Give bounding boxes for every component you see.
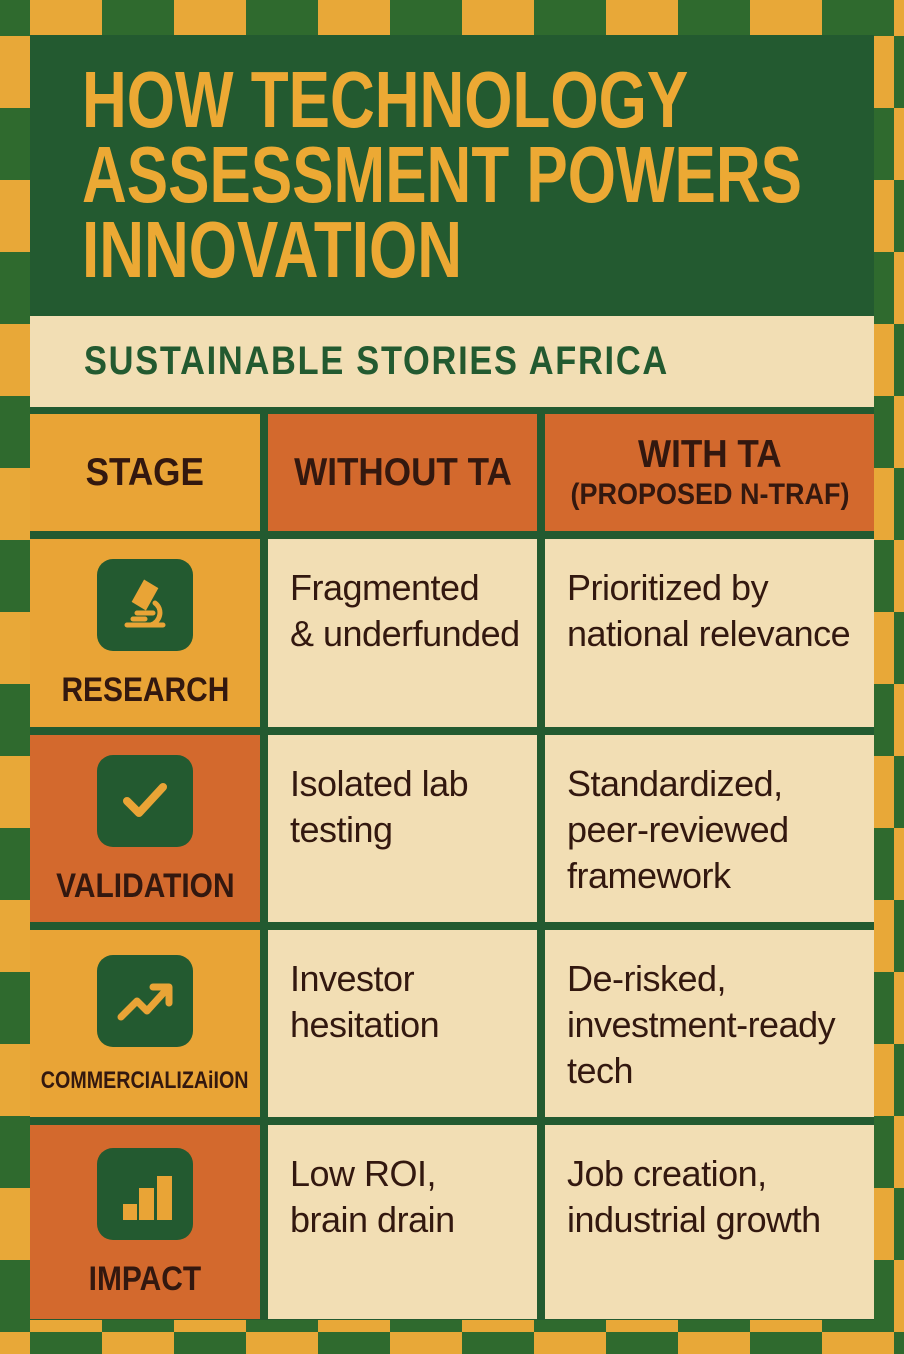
commercialization with TA: De-risked, — [567, 958, 726, 999]
impact with TA: industrial growth — [567, 1199, 821, 1240]
commercialization with TA — [545, 930, 874, 1117]
title: INNOVATION — [82, 205, 462, 294]
header: without TA — [268, 414, 537, 531]
impact without TA: Low ROI, — [290, 1153, 436, 1194]
header: with TA: WITH TA — [638, 433, 781, 476]
row: commercialization stage — [30, 930, 260, 1117]
validation with TA: framework — [567, 855, 731, 896]
header: without TA: WITHOUT TA — [294, 451, 511, 494]
research with TA: national relevance — [567, 613, 850, 654]
title: ASSESSMENT POWERS — [82, 130, 802, 219]
row: validation stage — [30, 735, 260, 922]
row: impact stage: IMPACT — [89, 1260, 201, 1298]
title: HOW TECHNOLOGY — [82, 55, 688, 144]
research with TA: Prioritized by — [567, 567, 768, 608]
row: validation stage: VALIDATION — [56, 866, 234, 904]
commercialization without TA: hesitation — [290, 1004, 439, 1045]
validation with TA: Standardized, — [567, 763, 783, 804]
header: stage: STAGE — [86, 451, 204, 494]
title — [82, 55, 802, 294]
commercialization without TA: Investor — [290, 958, 414, 999]
subtitle band — [30, 316, 874, 407]
header: stage — [30, 414, 260, 531]
commercialization with TA: investment-ready — [567, 1004, 835, 1045]
research without TA — [268, 539, 537, 727]
icon: bar chart — [97, 1148, 193, 1240]
research without TA: Fragmented — [290, 567, 479, 608]
icon: checkmark — [97, 754, 193, 846]
row: research stage — [30, 539, 260, 727]
research without TA: & underfunded — [290, 613, 520, 654]
validation with TA: peer-reviewed — [567, 809, 789, 850]
impact with TA: Job creation, — [567, 1153, 767, 1194]
row: commercialization stage: COMMERCIALIZAiION — [41, 1066, 249, 1094]
commercialization without TA — [268, 930, 537, 1117]
row: research stage: RESEARCH — [61, 671, 229, 709]
impact without TA: brain drain — [290, 1199, 455, 1240]
header: with TA: (PROPOSED N-TRAF) — [570, 478, 849, 511]
icon: trend arrow — [97, 954, 193, 1046]
impact without TA — [268, 1125, 537, 1319]
validation without TA: Isolated lab — [290, 763, 468, 804]
validation without TA — [268, 735, 537, 922]
impact with TA — [545, 1125, 874, 1319]
icon: microscope — [97, 559, 193, 651]
row: impact stage — [30, 1125, 260, 1319]
subtitle band: SUSTAINABLE STORIES AFRICA — [84, 339, 669, 383]
commercialization with TA: tech — [567, 1050, 633, 1091]
validation without TA: testing — [290, 809, 393, 850]
header: with TA — [545, 414, 874, 531]
research with TA — [545, 539, 874, 727]
validation with TA — [545, 735, 874, 922]
